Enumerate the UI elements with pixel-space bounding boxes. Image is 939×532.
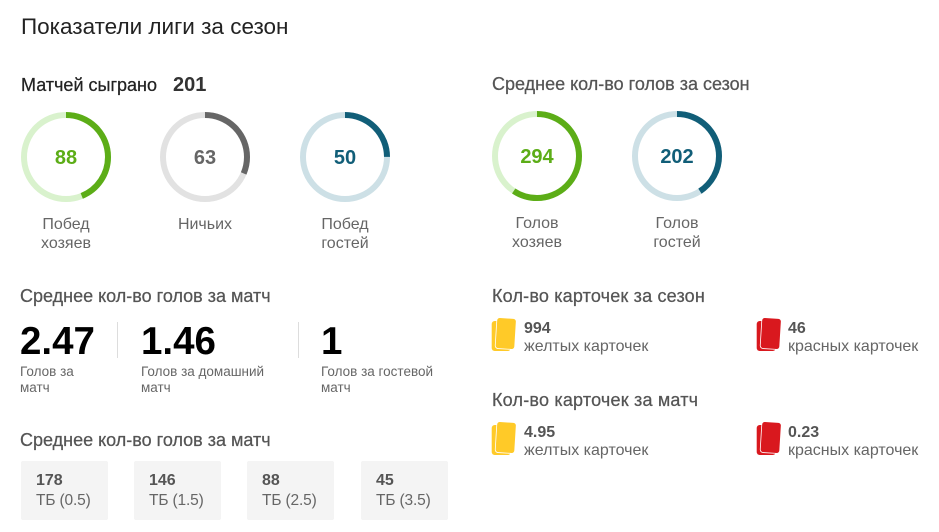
icon: yellow cards, match — [492, 422, 516, 455]
ring: home goals: 294 — [520, 146, 554, 168]
heading: cards per season: Кол-во карточек за сезон — [492, 286, 705, 306]
ring: away goals — [632, 111, 722, 201]
stat: goals per home match: матч — [141, 380, 171, 395]
box: over 1.5: 146 — [149, 472, 176, 489]
stat: red cards, match — [788, 424, 918, 459]
ring: home goals — [492, 111, 582, 201]
stat: red cards, season: красных карточек — [788, 338, 918, 355]
box: over 2.5: ТБ (2.5) — [262, 492, 317, 509]
stat: yellow cards, season: желтых карточек — [524, 338, 648, 355]
label: draws: Ничьих — [178, 216, 232, 233]
icon: yellow cards, season — [492, 318, 516, 351]
heading: average goals per match: Среднее кол-во голов за матч — [20, 286, 271, 306]
stat: yellow cards, season: 994 — [524, 320, 551, 337]
stat: goals per home match — [141, 320, 264, 395]
stat: goals per match: 2.47 — [20, 320, 95, 363]
stat: yellow cards, season — [524, 320, 648, 355]
ring: away wins: 50 — [334, 147, 356, 169]
stat: goals per away match — [321, 320, 433, 395]
box: over 2.5 — [247, 461, 334, 520]
title: Показатели лиги за сезон — [21, 14, 288, 39]
matches played heading: Матчей сыграно — [21, 75, 157, 95]
ring: away goals: 202 — [660, 146, 694, 168]
stat: goals per away match: матч — [321, 380, 351, 395]
matches played heading — [21, 74, 206, 96]
stat: red cards, season — [788, 320, 918, 355]
label: away wins: гостей — [321, 235, 369, 252]
box: over 0.5: 178 — [36, 472, 63, 489]
stat: goals per match: Голов за — [20, 364, 74, 379]
stat: red cards, match: 0.23 — [788, 424, 819, 441]
label: home wins: Побед — [42, 216, 90, 233]
label: home goals: хозяев — [512, 234, 562, 251]
label: away goals: Голов — [655, 215, 699, 232]
stat: goals per match: матч — [20, 380, 50, 395]
label: away wins — [321, 216, 369, 252]
box: over 3.5: ТБ (3.5) — [376, 492, 431, 509]
stat: goals per home match: 1.46 — [141, 320, 216, 363]
stat: goals per away match: 1 — [321, 320, 342, 363]
ring: home wins: 88 — [55, 147, 77, 169]
ring: away wins — [300, 112, 390, 202]
label: home goals: Голов — [515, 215, 559, 232]
icon: red cards, match — [756, 422, 781, 455]
stat: goals per home match: Голов за домашний — [141, 364, 264, 379]
label: away wins: Побед — [321, 216, 369, 233]
stat: goals per match — [20, 320, 95, 395]
stat: goals per away match: Голов за гостевой — [321, 364, 433, 379]
box: over 1.5: ТБ (1.5) — [149, 492, 204, 509]
stat: red cards, match: красных карточек — [788, 442, 918, 459]
stat: yellow cards, match — [524, 424, 648, 459]
label: home wins: хозяев — [41, 235, 91, 252]
stat: red cards, season: 46 — [788, 320, 806, 337]
ring: draws: 63 — [194, 147, 216, 169]
stat: yellow cards, match: желтых карточек — [524, 442, 648, 459]
label: away goals — [653, 215, 701, 251]
ring: draws — [160, 112, 250, 202]
box: over 0.5 — [21, 461, 108, 520]
box: over 3.5 — [361, 461, 448, 520]
stat: yellow cards, match: 4.95 — [524, 424, 555, 441]
box: over 0.5: ТБ (0.5) — [36, 492, 91, 509]
ring: home wins — [21, 112, 111, 202]
heading: average goals per match, totals: Среднее кол-во голов за матч — [20, 430, 271, 450]
heading: cards per match: Кол-во карточек за матч — [492, 390, 698, 410]
heading: average goals per season: Среднее кол-во голов за сезон — [492, 74, 750, 94]
icon: red cards, season — [756, 318, 781, 351]
label: home wins — [41, 216, 91, 252]
box: over 2.5: 88 — [262, 472, 280, 489]
matches played heading: 201 — [173, 74, 206, 96]
label: home goals — [512, 215, 562, 251]
label: away goals: гостей — [653, 234, 701, 251]
box: over 3.5: 45 — [376, 472, 394, 489]
box: over 1.5 — [134, 461, 221, 520]
